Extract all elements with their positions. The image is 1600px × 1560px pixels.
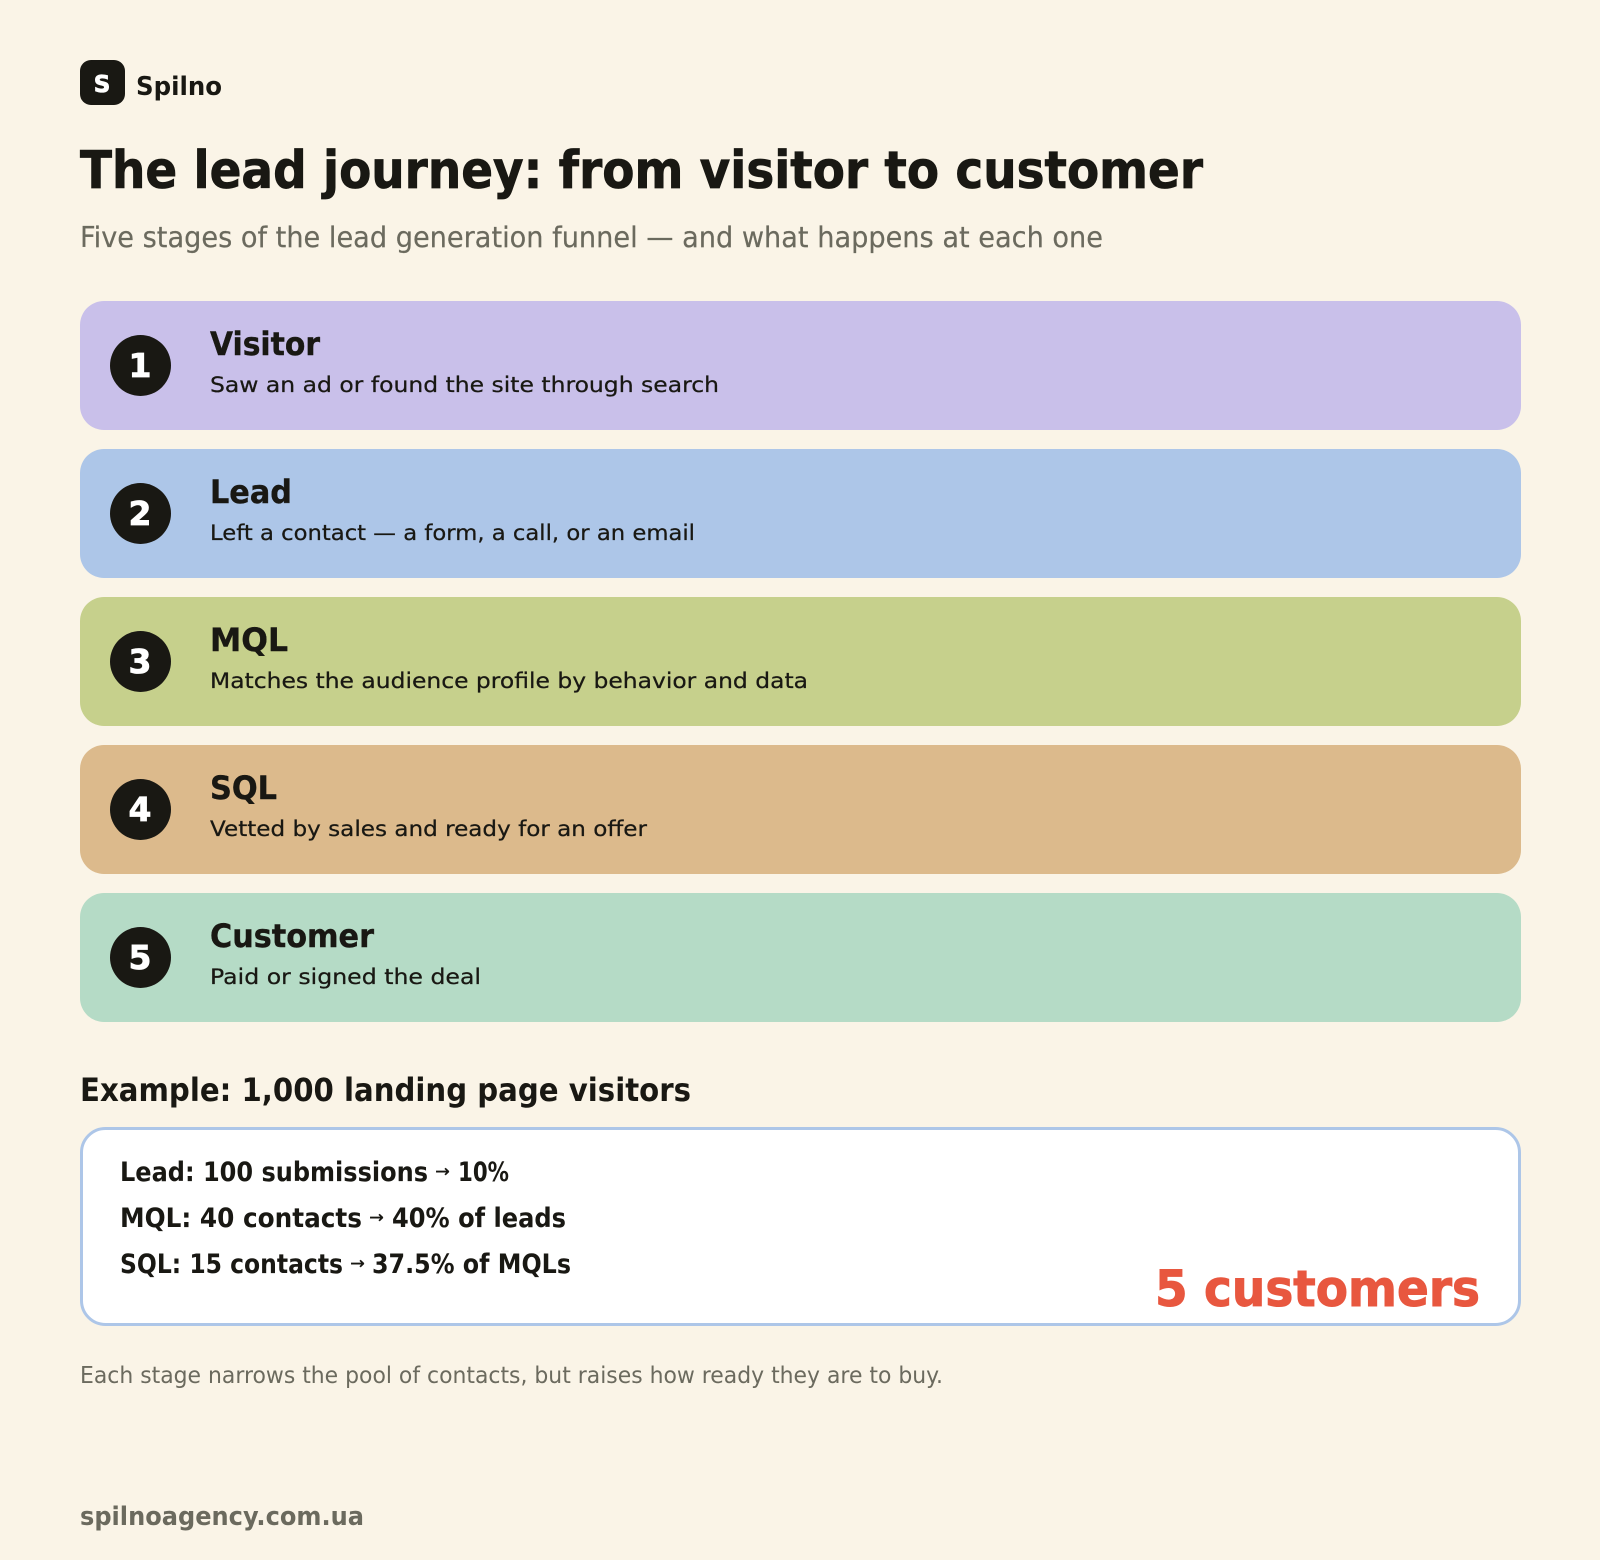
result: Lead: → [435,1162,450,1182]
stage description: Vetted by sales and ready for an offer [210,817,647,842]
number badge 2: 2 [129,494,151,533]
panel: example results [82,1128,1520,1324]
result: MQL: → [369,1208,384,1228]
result: MQL [120,1203,566,1234]
number badge 4 [110,779,171,840]
note: Each stage narrows the pool of contacts, but raises how ready they are to buy. [80,1363,943,1389]
stage name: Lead [210,473,292,511]
footer: website: spilnoagency.com.ua [80,1502,364,1532]
title: The lead journey: from visitor to customer [80,141,1204,201]
stage description: Saw an ad or found the site through search [210,373,719,398]
brand name: Spilno [136,72,222,102]
panel: stage 1 Visitor [80,301,1521,430]
stage description: Paid or signed the deal [210,965,481,990]
number badge 2 [110,483,171,544]
icon: S badge: S [94,72,110,98]
subtitle: Five stages of the lead generation funnel — and what happens at each one [80,221,1103,254]
number badge 4: 4 [129,790,151,829]
number badge 1 [110,335,171,396]
result: SQL [120,1249,571,1280]
result: SQL: SQL: 15 contacts [120,1249,343,1280]
number badge 3: 3 [129,642,151,681]
example heading: Example: 1,000 landing page visitors [80,1071,691,1109]
logo: Spilno [80,60,222,105]
result: Lead: 10% [458,1157,509,1188]
result: MQL: MQL: 40 contacts [120,1203,362,1234]
number badge 5 [110,927,171,988]
stage name: MQL [210,621,288,659]
result: SQL: 37.5% of MQLs [372,1249,571,1280]
stage description: Matches the audience profile by behavior and data [210,669,808,694]
icon: S badge [80,60,125,105]
number badge 5: 5 [129,938,151,977]
panel: stage 4 SQL [80,745,1521,874]
panel: stage 2 Lead [80,449,1521,578]
stage name: SQL [210,769,277,807]
stage name: Customer [210,917,374,955]
result: customers total: 5 customers [1155,1260,1480,1318]
result: MQL: 40% of leads [392,1203,566,1234]
result: SQL: → [350,1254,365,1274]
panel: stage 5 Customer [80,893,1521,1022]
number badge 3 [110,631,171,692]
number badge 1: 1 [129,346,151,385]
stage description: Left a contact — a form, a call, or an email [210,521,695,546]
result: Lead: Lead: 100 submissions [120,1157,428,1188]
panel: stage 3 MQL [80,597,1521,726]
stage name: Visitor [210,325,320,363]
